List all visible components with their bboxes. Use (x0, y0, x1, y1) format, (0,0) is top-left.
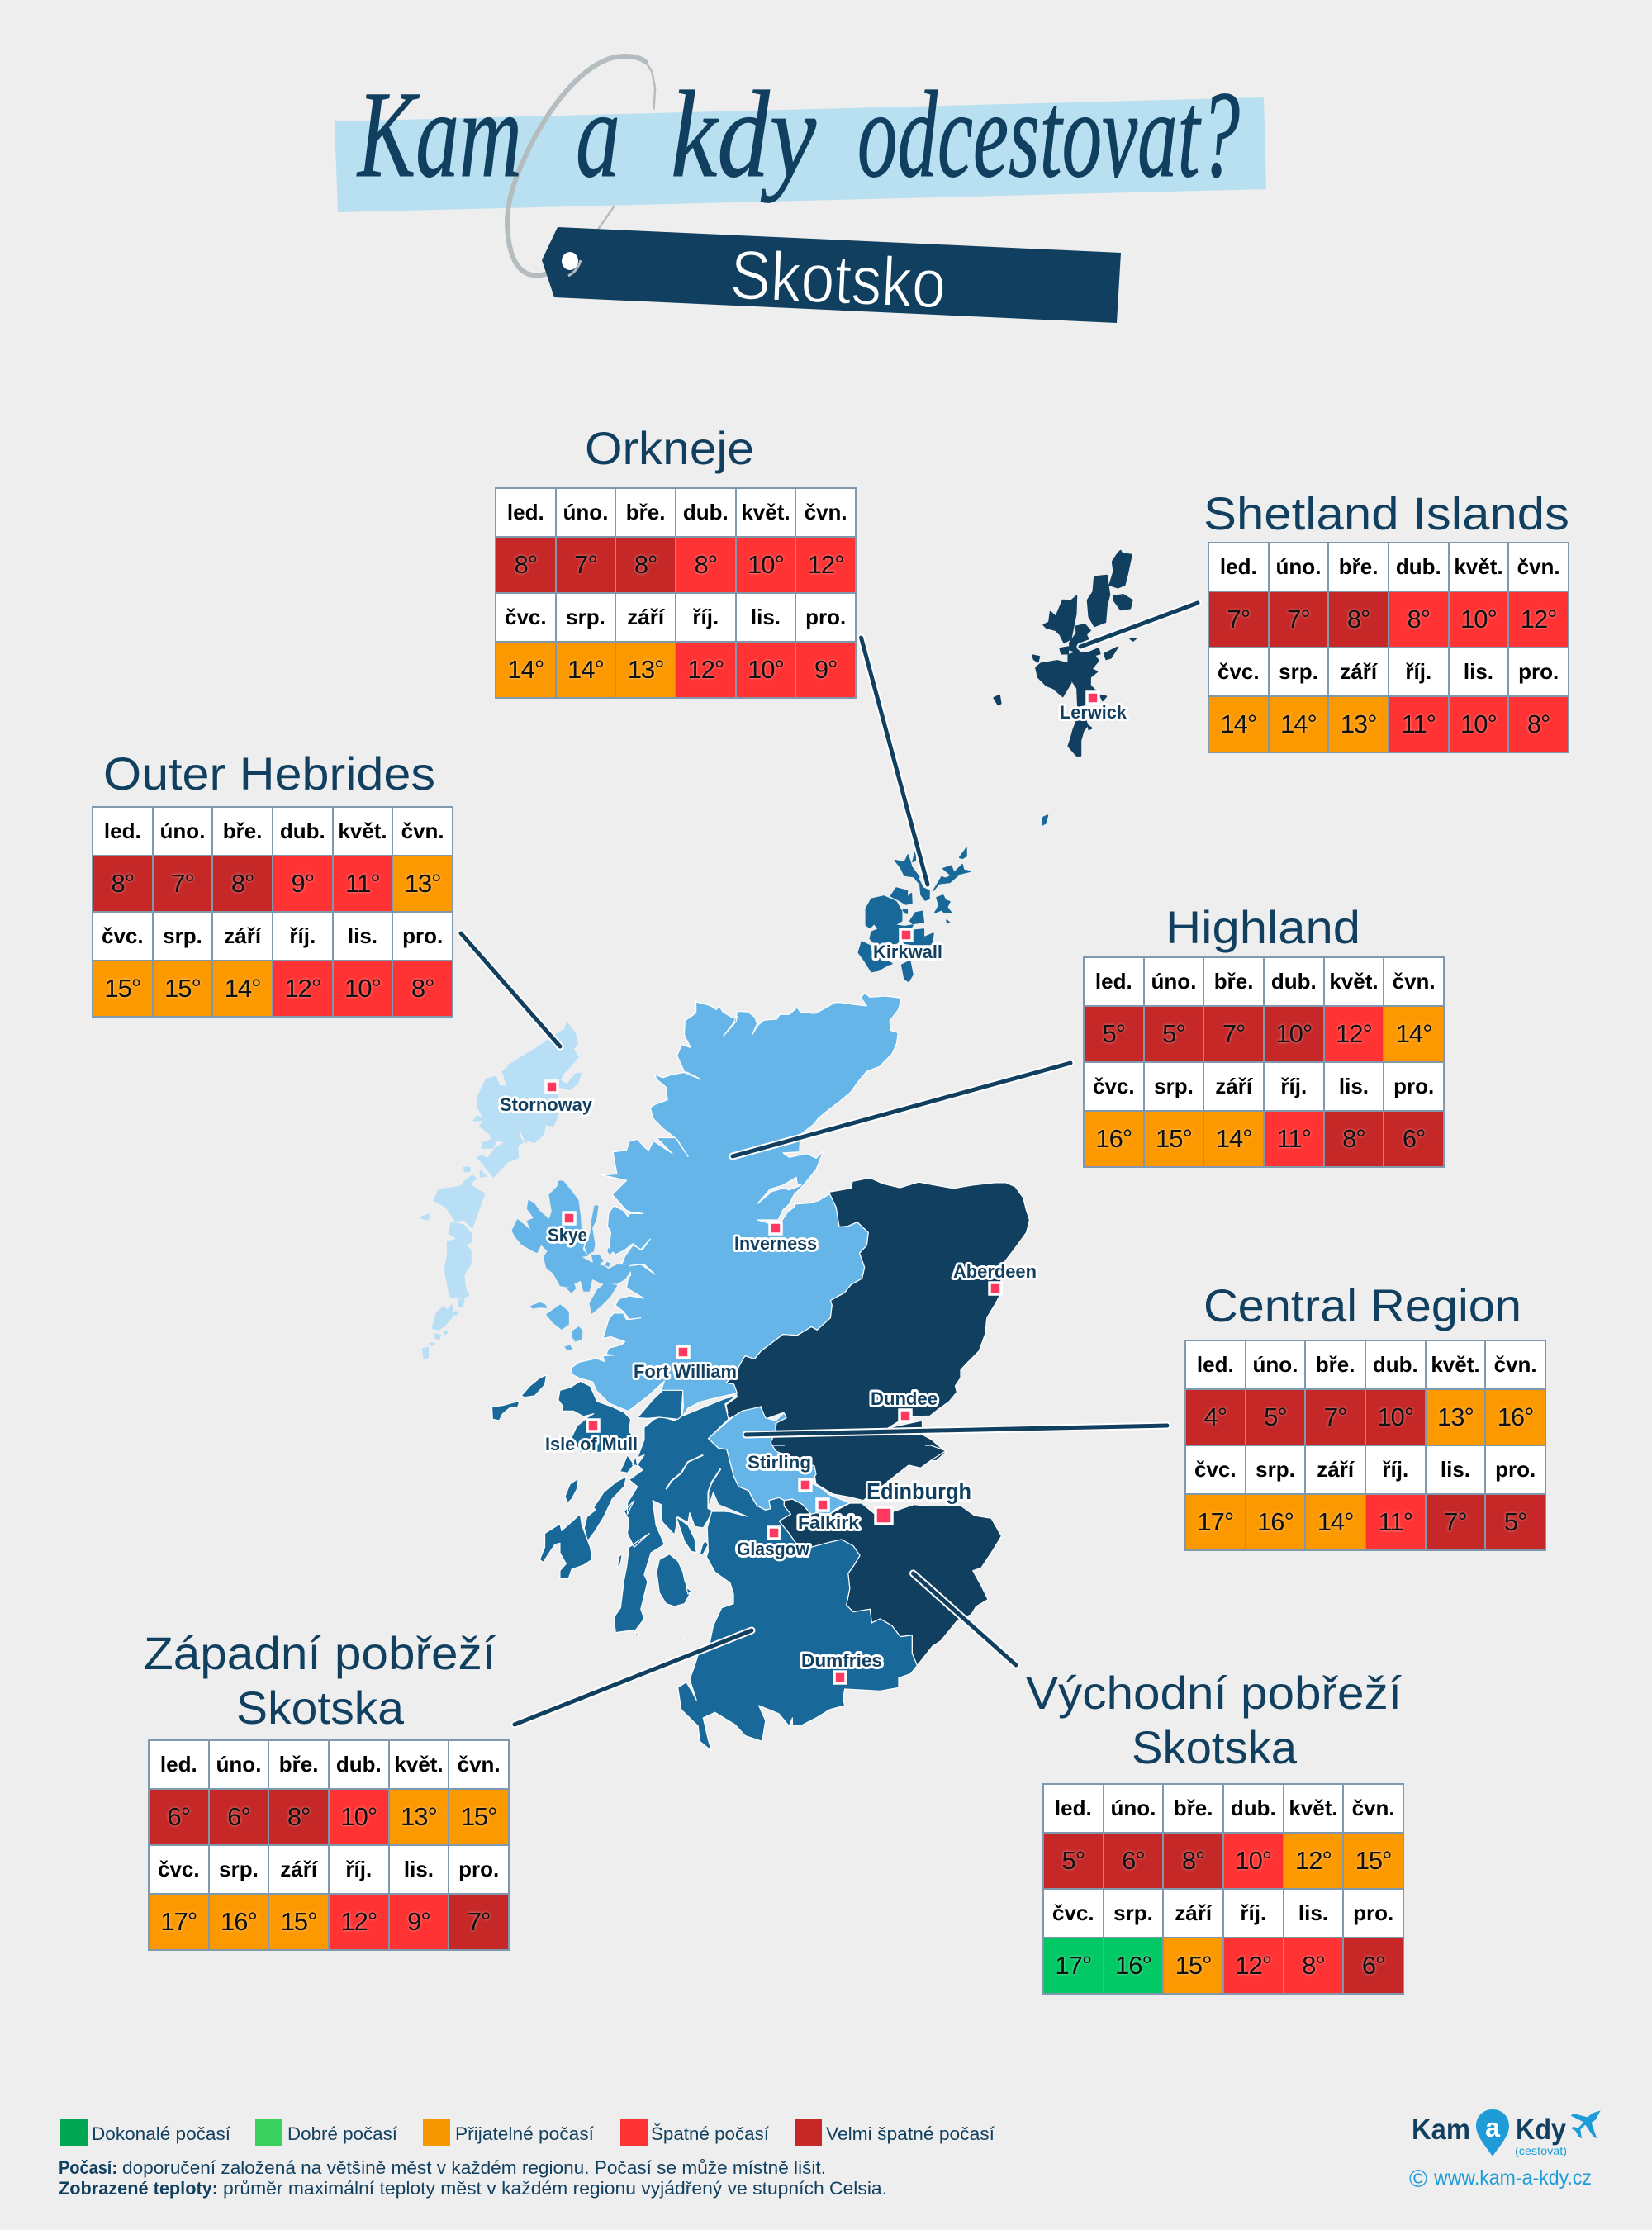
table: Outer Hebrides: 8° (231, 869, 254, 898)
city labels: Stirling (748, 1452, 811, 1473)
logo: a (1485, 2113, 1500, 2142)
table: Shetland Islands: 14° (1280, 709, 1317, 738)
table: Highland: 15° (1156, 1124, 1192, 1153)
table: Outer Hebrides: pro. (402, 923, 443, 948)
table: East coast: 6° (1122, 1846, 1145, 1875)
table: Shetland Islands: 14° (1220, 709, 1256, 738)
table: Central Region: lis. (1441, 1457, 1470, 1482)
table: East coast: 6° (1362, 1951, 1384, 1980)
legend: Dokonalé počasí (92, 2123, 230, 2144)
table: Highland: květ. (1329, 969, 1379, 994)
table: Shetland Islands (1208, 542, 1569, 753)
table: Highland: 10° (1275, 1019, 1312, 1048)
table: Shetland Islands: srp. (1279, 659, 1318, 684)
table: Shetland Islands: pro. (1518, 659, 1559, 684)
table: Outer Hebrides: 12° (284, 974, 320, 1003)
city labels: Dumfries (801, 1650, 882, 1671)
region: Highland mainland (571, 994, 901, 1417)
logo: (cestovat) (1515, 2144, 1567, 2157)
table: West coast: čvc. (158, 1857, 200, 1881)
table: Central Region: úno. (1253, 1352, 1298, 1377)
table: Highland: čvn. (1393, 969, 1436, 994)
table: West coast: lis. (404, 1857, 434, 1881)
table: Shetland Islands: 8° (1527, 709, 1550, 738)
table: Highland: srp. (1154, 1074, 1194, 1098)
table: Outer Hebrides: 11° (345, 869, 380, 898)
table: Highland: bře. (1214, 969, 1253, 994)
table: Outer Hebrides: srp. (163, 923, 202, 948)
table: Orkney: bře. (626, 500, 665, 524)
table: Outer Hebrides: 10° (344, 974, 381, 1003)
table: Highland: led. (1095, 969, 1132, 994)
table: Outer Hebrides: bře. (223, 818, 262, 843)
table: Central Region: 16° (1498, 1402, 1534, 1431)
table: Central Region: pro. (1495, 1457, 1536, 1482)
table: East coast: září (1175, 1900, 1212, 1925)
heading: West coast: Západní pobřeží (144, 1627, 496, 1679)
table: Orkney: srp. (566, 605, 605, 629)
city labels: Stornoway (500, 1094, 593, 1115)
table: West coast: pro. (458, 1857, 499, 1881)
table: Outer Hebrides: květ. (338, 818, 387, 843)
table: East coast: 10° (1235, 1846, 1271, 1875)
title banner (335, 97, 1266, 212)
table: East coast: 17° (1055, 1951, 1091, 1980)
region: eastern Scotland (Fife and Borders) (771, 1445, 1001, 1666)
footnotes: Zobrazené teploty: (59, 2178, 218, 2199)
table: Shetland Islands: lis. (1464, 659, 1493, 684)
table: Central Region: 5° (1264, 1402, 1287, 1431)
city labels: Dundee (871, 1388, 938, 1409)
table: Highland: říj. (1280, 1074, 1307, 1098)
luggage tag with country name (542, 227, 1121, 323)
table: Outer Hebrides: čvn. (401, 818, 444, 843)
heading: East coast (1026, 1667, 1402, 1773)
luggage tag with country name: Skotsko (729, 235, 947, 323)
table: East coast: 15° (1355, 1846, 1392, 1875)
table: Orkney: 8° (694, 550, 717, 579)
table: Central Region: 11° (1378, 1507, 1412, 1536)
table: Central Region: 17° (1197, 1507, 1233, 1536)
table: Orkney: květ. (741, 500, 790, 524)
table: Shetland Islands: květ. (1454, 554, 1503, 579)
table: Central Region: čvn. (1494, 1352, 1537, 1377)
footnotes: průměr maximální teploty měst v každém regionu vyjádřený ve stupních Celsia. (223, 2178, 887, 2199)
table: Central Region: 7° (1324, 1402, 1346, 1431)
footnotes: Počasí: (59, 2157, 117, 2178)
table: West coast: led. (160, 1752, 197, 1777)
table: Orkney: čvn. (805, 500, 847, 524)
table: Highland: dub. (1271, 969, 1317, 994)
table: West coast: květ. (394, 1752, 444, 1777)
table: Orkney: 12° (808, 550, 844, 579)
city labels: Lerwick (1060, 702, 1127, 723)
ring of the luggage tag (507, 56, 655, 275)
heading: West coast: Skotska (236, 1682, 405, 1734)
table: Outer Hebrides: 9° (291, 869, 314, 898)
table: Outer Hebrides: 8° (111, 869, 134, 898)
table: West coast: 9° (407, 1907, 430, 1936)
title text: Kam (357, 66, 522, 203)
legend: Přijatelné počasí (455, 2123, 594, 2144)
table: Central Region: 16° (1257, 1507, 1294, 1536)
table: Orkney: 10° (748, 550, 784, 579)
leader line: Orkney (861, 638, 928, 885)
table: West coast: 16° (221, 1907, 257, 1936)
table: East coast: květ. (1289, 1796, 1338, 1820)
footnotes: doporučení založená na většině měst v každém regionu. Počasí se může místně lišit. (122, 2157, 826, 2178)
table: Outer Hebrides: 15° (104, 974, 140, 1003)
table: Orkney: 13° (628, 655, 664, 684)
logo: Kam (1412, 2114, 1470, 2146)
table: West coast: bře. (279, 1752, 318, 1777)
table: Central Region: srp. (1256, 1457, 1295, 1482)
table: Orkney: dub. (683, 500, 729, 524)
region: Highland, Skye and the Small Isles (512, 1181, 630, 1350)
leader line: West coast (515, 1630, 752, 1725)
table: East coast: lis. (1298, 1900, 1328, 1925)
table: Shetland Islands: 12° (1521, 605, 1557, 633)
city labels: Skye (548, 1225, 587, 1245)
table: Central Region: 14° (1317, 1507, 1354, 1536)
table: Orkney: 7° (574, 550, 597, 579)
table: Shetland Islands: led. (1220, 554, 1257, 579)
footnotes (59, 2157, 887, 2199)
table: Highland: 7° (1222, 1019, 1245, 1048)
table: Outer Hebrides: 13° (405, 869, 441, 898)
title text: kdy (671, 66, 816, 203)
table: East coast: 12° (1295, 1846, 1332, 1875)
table: Outer Hebrides: 7° (171, 869, 194, 898)
table: West coast: 8° (287, 1802, 310, 1831)
table: West coast: 12° (340, 1907, 377, 1936)
table: Highland: pro. (1393, 1074, 1434, 1098)
logo (1409, 2109, 1601, 2193)
table: Central Region: září (1317, 1457, 1354, 1482)
logo: www.kam-a-kdy.cz (1433, 2166, 1592, 2190)
table: Central Region: říj. (1382, 1457, 1408, 1482)
table: East coast: 8° (1302, 1951, 1325, 1980)
heading: Highland: Highland (1165, 901, 1360, 953)
table: West coast: čvn. (458, 1752, 501, 1777)
table: Central Region: 5° (1504, 1507, 1526, 1536)
heading: East coast: Východní pobřeží (1026, 1667, 1402, 1719)
legend: Velmi špatné počasí (826, 2123, 995, 2144)
table: Central Region: led. (1197, 1352, 1234, 1377)
table: Shetland Islands: 10° (1460, 709, 1497, 738)
table: Orkney: 12° (687, 655, 724, 684)
city labels: Aberdeen (953, 1261, 1037, 1282)
table: Orkney: 14° (507, 655, 544, 684)
leader line: Central (746, 1426, 1167, 1435)
logo: © (1409, 2166, 1427, 2193)
heading: East coast: Skotska (1132, 1721, 1298, 1773)
heading: Shetland Islands: Shetland Islands (1203, 487, 1569, 539)
table: West coast: září (280, 1857, 317, 1881)
table: West coast: 17° (160, 1907, 197, 1936)
city labels: Fort William (634, 1361, 737, 1382)
city labels: Edinburgh (866, 1478, 971, 1504)
table: Shetland Islands: 11° (1401, 709, 1436, 738)
table: West coast: 6° (167, 1802, 190, 1831)
table: Outer Hebrides: 15° (164, 974, 201, 1003)
table: East coast: dub. (1231, 1796, 1276, 1820)
table: East coast: bře. (1174, 1796, 1213, 1820)
table: Central Region: 7° (1444, 1507, 1467, 1536)
table: Orkney: říj. (692, 605, 719, 629)
table: Orkney: 9° (814, 655, 837, 684)
table: Shetland Islands: 8° (1347, 605, 1370, 633)
table: Central Region: dub. (1373, 1352, 1418, 1377)
table: Central Region: čvc. (1194, 1457, 1237, 1482)
table: Shetland Islands: září (1340, 659, 1377, 684)
table: Outer Hebrides: led. (104, 818, 141, 843)
table: Outer Hebrides: čvc. (102, 923, 144, 948)
table: Outer Hebrides: 8° (411, 974, 434, 1003)
city labels (500, 702, 1127, 1671)
table: Highland: 14° (1396, 1019, 1432, 1048)
region: Shetland Islands (994, 551, 1136, 825)
table: Shetland Islands: 8° (1407, 605, 1430, 633)
table: Orkney: 8° (634, 550, 657, 579)
table: Highland (1083, 956, 1445, 1168)
table: East coast: 16° (1115, 1951, 1151, 1980)
table: East coast: pro. (1353, 1900, 1393, 1925)
table: Shetland Islands: 13° (1341, 709, 1377, 738)
table: Orkney: 8° (514, 550, 537, 579)
table: Shetland Islands: 7° (1227, 605, 1250, 633)
table: Outer Hebrides: říj. (289, 923, 316, 948)
table: Shetland Islands: čvc. (1218, 659, 1260, 684)
table: West coast: 6° (227, 1802, 250, 1831)
table: Highland: 11° (1277, 1124, 1311, 1153)
table: Highland: lis. (1339, 1074, 1369, 1098)
table: Outer Hebrides: září (224, 923, 261, 948)
table: Highland: 14° (1216, 1124, 1252, 1153)
table: Orkney (495, 487, 857, 699)
table: Highland: 12° (1336, 1019, 1372, 1048)
table: East coast: 12° (1235, 1951, 1271, 1980)
table: Highland: 8° (1342, 1124, 1365, 1153)
table: Orkney: září (627, 605, 664, 629)
leader line: Highland (733, 1063, 1070, 1156)
table: East coast: srp. (1113, 1900, 1153, 1925)
table: East coast (1042, 1783, 1404, 1995)
legend: Dobré počasí (287, 2123, 397, 2144)
table: East coast: led. (1055, 1796, 1092, 1820)
table: Shetland Islands: říj. (1405, 659, 1431, 684)
table: West coast: 10° (340, 1802, 377, 1831)
table: Central Region: 4° (1204, 1402, 1227, 1431)
table: West coast (148, 1739, 510, 1951)
region: eastern Scotland (north) (724, 1178, 1029, 1461)
city labels: Inverness (734, 1233, 817, 1254)
heading: Orkneje: Orkneje (585, 422, 754, 474)
table: West coast: 15° (281, 1907, 317, 1936)
title text: odcestovat? (857, 66, 1240, 203)
title text (357, 66, 1240, 203)
table: Outer Hebrides (92, 806, 453, 1018)
region: Outer Hebrides (421, 1022, 581, 1359)
table: Shetland Islands: bře. (1339, 554, 1378, 579)
table: Shetland Islands: čvn. (1517, 554, 1560, 579)
region: Orkney (858, 848, 971, 981)
table: West coast: úno. (216, 1752, 261, 1777)
heading: West coast (144, 1627, 496, 1734)
table: Outer Hebrides: 14° (225, 974, 261, 1003)
table: Orkney: pro. (805, 605, 846, 629)
table: Highland: září (1215, 1074, 1252, 1098)
table: East coast: říj. (1240, 1900, 1266, 1925)
table: Shetland Islands: úno. (1276, 554, 1321, 579)
heading: Central Region: Central Region (1203, 1279, 1521, 1331)
leader line: East coast (914, 1573, 1016, 1665)
table: Central Region: květ. (1431, 1352, 1480, 1377)
table: Highland: 16° (1095, 1124, 1132, 1153)
table: Central Region (1184, 1340, 1546, 1551)
table: West coast: 15° (461, 1802, 497, 1831)
table: West coast: říj. (345, 1857, 372, 1881)
city labels: Falkirk (798, 1512, 860, 1533)
table: Outer Hebrides: úno. (160, 818, 205, 843)
legend (60, 2118, 995, 2146)
region: western Scotland (492, 1375, 917, 1751)
table: West coast: 13° (401, 1802, 437, 1831)
table: Outer Hebrides: dub. (280, 818, 325, 843)
table: East coast: čvc. (1052, 1900, 1094, 1925)
city labels: Glasgow (737, 1539, 810, 1559)
table: Central Region: 10° (1377, 1402, 1413, 1431)
table: Central Region: 13° (1437, 1402, 1474, 1431)
table: East coast: 15° (1175, 1951, 1212, 1980)
table: East coast: úno. (1111, 1796, 1156, 1820)
table: Orkney: čvc. (505, 605, 547, 629)
table: East coast: 8° (1182, 1846, 1204, 1875)
table: West coast: dub. (336, 1752, 382, 1777)
table: Shetland Islands: 7° (1287, 605, 1310, 633)
table: Orkney: úno. (563, 500, 608, 524)
leader line: Shetland (1080, 603, 1198, 647)
table: Orkney: led. (507, 500, 544, 524)
region: Central (Stirling) (708, 1407, 850, 1514)
leader line: Outer Hebrides (461, 933, 560, 1046)
table: Highland: 5° (1102, 1019, 1125, 1048)
title text: a (576, 66, 620, 203)
table: Shetland Islands: 10° (1460, 605, 1497, 633)
table: Highland: 5° (1162, 1019, 1185, 1048)
city markers (546, 692, 1099, 1683)
seam patch (785, 1441, 925, 1462)
table: Shetland Islands: dub. (1396, 554, 1441, 579)
table: Orkney: 14° (567, 655, 604, 684)
logo: Kdy (1516, 2114, 1566, 2146)
table: Highland: 6° (1403, 1124, 1425, 1153)
table: Outer Hebrides: lis. (348, 923, 377, 948)
table: East coast: 5° (1062, 1846, 1085, 1875)
table: Orkney: lis. (751, 605, 781, 629)
city labels: Kirkwall (873, 942, 942, 962)
table: West coast: srp. (219, 1857, 259, 1881)
table: West coast: 7° (468, 1907, 490, 1936)
table: Highland: čvc. (1093, 1074, 1135, 1098)
table: Orkney: 10° (748, 655, 784, 684)
city labels: Isle of Mull (545, 1434, 638, 1454)
heading: Outer Hebrides: Outer Hebrides (103, 747, 435, 799)
legend: Špatné počasí (651, 2123, 769, 2144)
table: Central Region: bře. (1316, 1352, 1355, 1377)
table: Highland: úno. (1151, 969, 1196, 994)
table: East coast: čvn. (1352, 1796, 1395, 1820)
